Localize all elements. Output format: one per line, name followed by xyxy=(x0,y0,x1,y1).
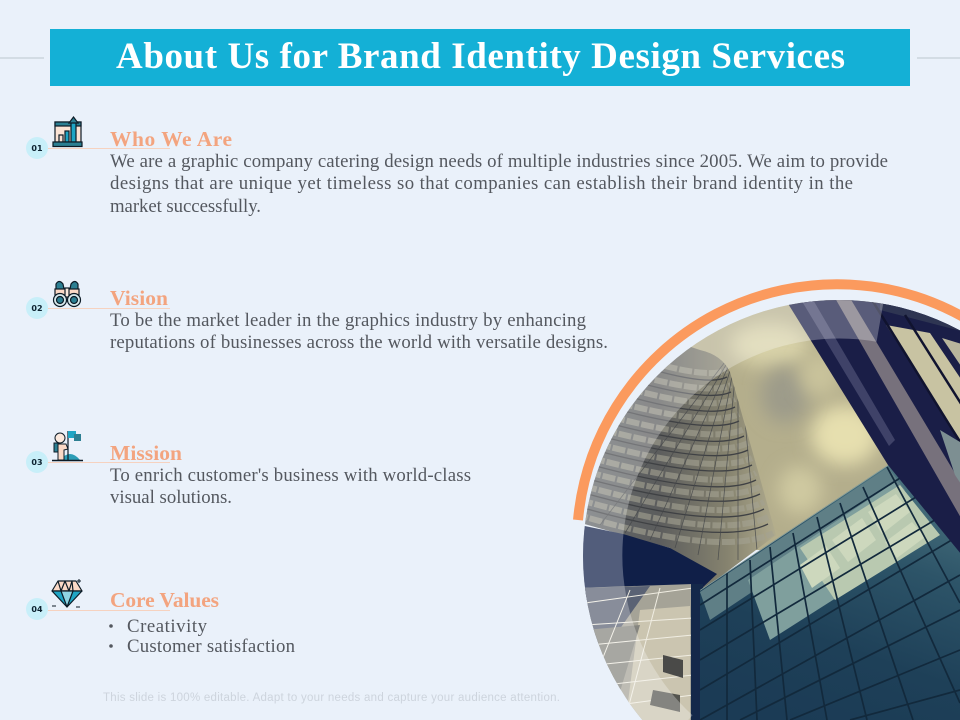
photo: office towers in circle xyxy=(570,280,960,720)
body text: designs that are unique yet timeless so that companies can establish their brand identity in the xyxy=(110,173,853,194)
bullet list xyxy=(109,616,296,657)
icon: diamond xyxy=(52,579,82,607)
number badge 01: 01 xyxy=(31,144,43,153)
round tower xyxy=(585,347,774,588)
glass building xyxy=(700,440,960,720)
podium building xyxy=(575,584,703,720)
section: who we are xyxy=(26,117,888,217)
body text: reputations of businesses across the world with versatile designs. xyxy=(110,332,608,353)
icon: astronaut with flag xyxy=(52,431,83,460)
right dark building xyxy=(788,300,960,552)
orange arc xyxy=(578,284,960,520)
number badge 02: 02 xyxy=(31,304,43,313)
number badge 03 xyxy=(26,451,48,473)
number badge 01 xyxy=(26,137,48,159)
body text: visual solutions. xyxy=(110,487,232,508)
section: core values xyxy=(26,579,296,657)
bullet list: Creativity xyxy=(127,616,208,637)
body text xyxy=(110,310,608,353)
number badge 03: 03 xyxy=(31,458,43,467)
body text xyxy=(110,465,471,508)
body text: To enrich customer's business with world-class xyxy=(110,465,471,486)
heading: Who We Are xyxy=(110,127,232,151)
number badge 04: 04 xyxy=(31,605,43,614)
number badge 04 xyxy=(26,598,48,620)
translucent ring overlay xyxy=(602,318,880,720)
body text xyxy=(110,151,888,217)
sky xyxy=(690,290,900,550)
podium dark band xyxy=(575,524,717,600)
body text: market successfully. xyxy=(110,196,261,217)
body text: We are a graphic company catering design needs of multiple industries since 2005. We aim to provide xyxy=(110,151,888,172)
section: vision xyxy=(26,282,608,353)
footer note: This slide is 100% editable. Adapt to your needs and capture your audience attention. xyxy=(103,692,560,704)
title banner xyxy=(0,29,960,86)
number badge 02 xyxy=(26,297,48,319)
heading: Vision xyxy=(110,286,168,310)
body text: To be the market leader in the graphics industry by enhancing xyxy=(110,310,587,331)
pale window panes xyxy=(700,467,905,620)
icon: laptop with chart xyxy=(53,117,82,146)
bullet list: Customer satisfaction xyxy=(127,636,296,657)
icon: binoculars xyxy=(54,282,80,306)
heading: Mission xyxy=(110,441,182,465)
section: mission xyxy=(26,431,471,508)
heading: Core Values xyxy=(110,588,219,612)
title banner: About Us for Brand Identity Design Services xyxy=(116,36,845,77)
